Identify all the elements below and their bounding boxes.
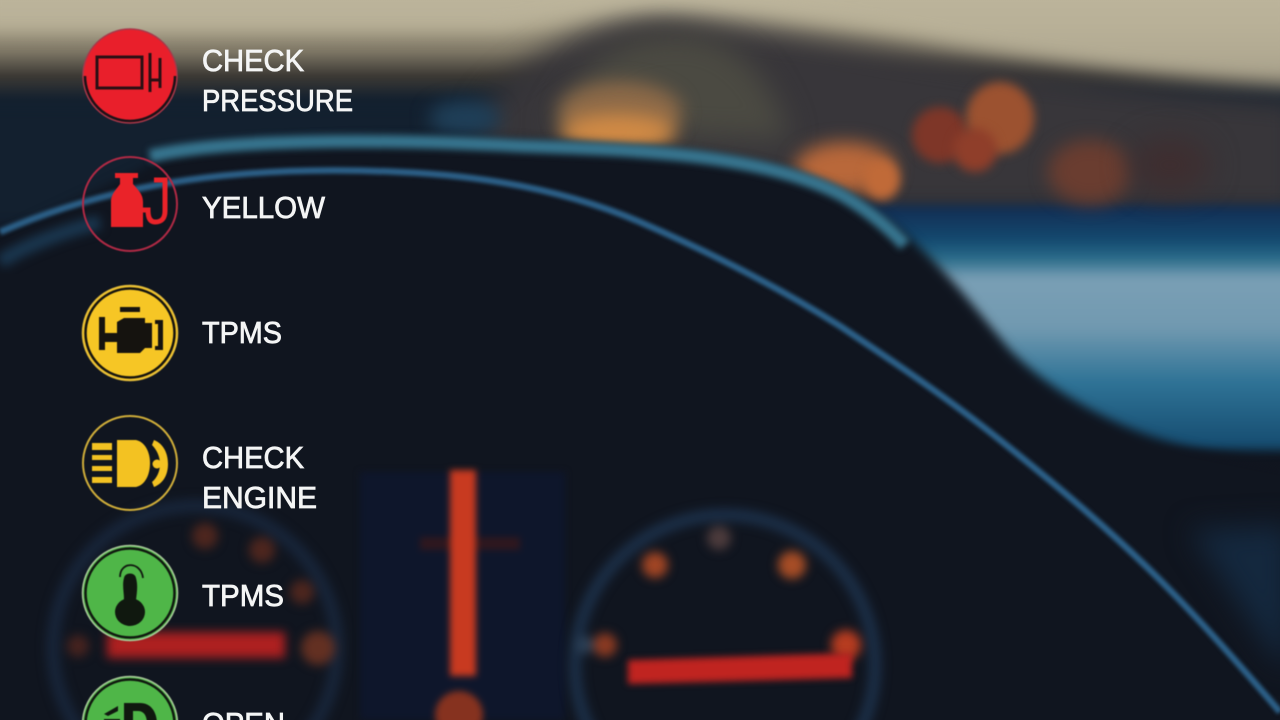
icon: yellow engine lamp (82, 286, 178, 380)
label: CHECK (202, 43, 304, 78)
label: YELLOW (202, 190, 326, 225)
icon: yellow headlight lamp (83, 416, 177, 510)
icon: green gear-shift lamp (82, 546, 178, 640)
label: ENGINE (202, 480, 317, 515)
item: tpms green (82, 546, 284, 640)
item: yellow (83, 157, 326, 251)
item: tpms amber (82, 286, 282, 380)
label: TPMS (202, 578, 284, 613)
item: check engine (83, 416, 317, 515)
item: open (82, 676, 285, 720)
label: CHECK (202, 440, 304, 475)
instrument cluster: right gauge (575, 515, 875, 720)
item: check pressure (83, 29, 353, 123)
instrument cluster: centre bar (360, 470, 565, 720)
instrument cluster: left gauge (53, 506, 337, 720)
icon: red pressure lamp (83, 29, 177, 123)
icon: red oil-can lamp outline (83, 157, 177, 251)
gauge needle (628, 653, 852, 684)
label: PRESSURE (202, 83, 353, 118)
label: TPMS (202, 315, 282, 350)
icon: green door lamp (82, 676, 178, 720)
